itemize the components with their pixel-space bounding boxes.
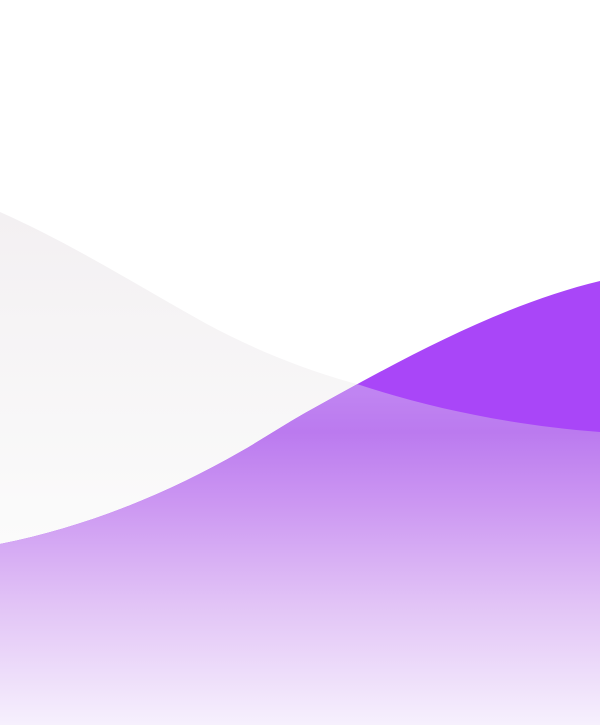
gray wave	[0, 212, 600, 725]
faded purple overlap	[0, 384, 600, 725]
purple wave	[0, 281, 600, 725]
